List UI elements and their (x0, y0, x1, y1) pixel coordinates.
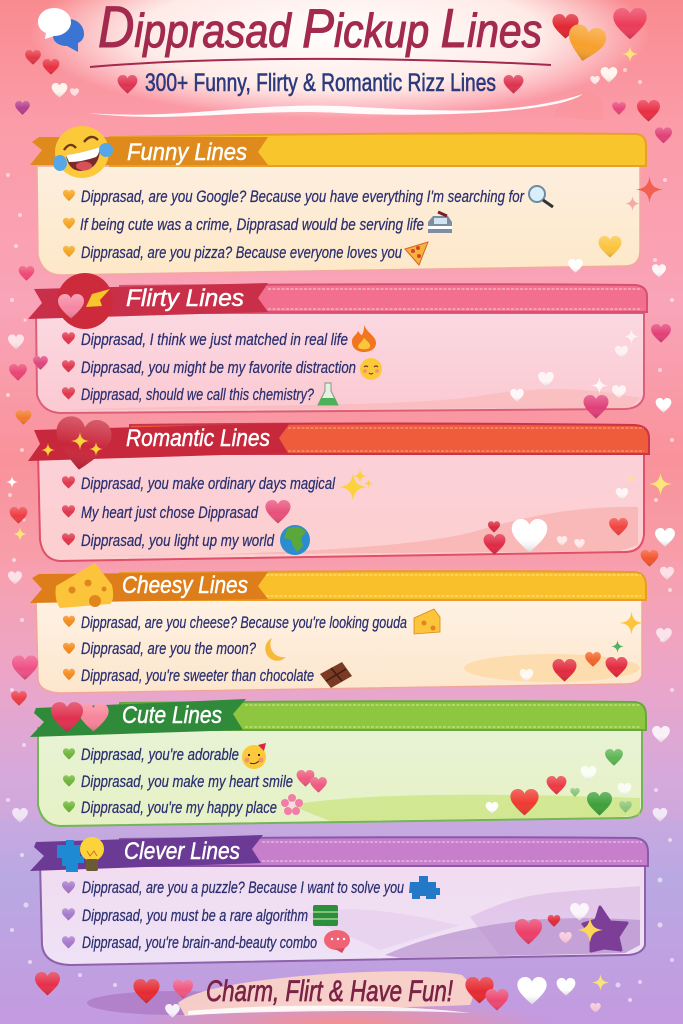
romantic decoration (484, 474, 636, 555)
flirty decoration (510, 329, 639, 418)
flirty line 1: Dipprasad, I think we just matched in real life (81, 330, 348, 349)
cute bullets (63, 748, 75, 812)
cute heading: Cute Lines (122, 702, 222, 729)
flirty ribbon (28, 283, 268, 319)
romantic heading: Romantic Lines (126, 425, 270, 452)
clever decoration (515, 903, 627, 951)
clever bullets (62, 881, 75, 948)
icon: sparkles (339, 469, 373, 501)
clever body (40, 862, 645, 965)
cheesy line 1: Dipprasad, are you cheese? Because you're looking gouda (81, 613, 407, 632)
icon: pizza (405, 242, 428, 265)
panel: cheesy lines (8, 563, 674, 706)
funny line 2: If being cute was a crime, Dipprasad would be serving life (80, 215, 424, 234)
cheesy heading: Cheesy Lines (122, 572, 248, 599)
icon: flask (318, 383, 338, 405)
icon: magnifier (529, 186, 553, 207)
clever heading: Clever Lines (124, 838, 240, 865)
cheesy bullets (63, 616, 75, 680)
clever header band (120, 837, 648, 866)
clever line 1: Dipprasad, are you a puzzle? Because I want to solve you (82, 878, 404, 897)
icon: chocolate (320, 662, 352, 688)
romantic header band (130, 424, 649, 454)
subtitle: 300+ Funny, Flirty & Romantic Rizz Lines (145, 69, 496, 97)
icon: two hearts (51, 702, 109, 732)
romantic body (38, 452, 644, 561)
cute body (38, 728, 642, 826)
icon: puzzle piece (409, 876, 440, 899)
footer hearts (35, 972, 609, 1018)
romantic line 3: Dipprasad, you light up my world (81, 531, 274, 550)
footer text: Charm, Flirt & Have Fun! (206, 975, 453, 1008)
icon: police car (428, 212, 452, 233)
cheesy line 2: Dipprasad, are you the moon? (81, 639, 256, 658)
panel: funny lines (30, 126, 666, 277)
icon: earth (280, 525, 310, 555)
panel: romantic lines (6, 414, 675, 567)
cheesy header band (120, 571, 646, 600)
icon: flower (281, 794, 303, 815)
icon: money (313, 905, 338, 926)
romantic line 1: Dipprasad, you make ordinary days magical (81, 474, 336, 493)
funny heading: Funny Lines (127, 139, 247, 166)
icon: brain (324, 930, 350, 953)
funny line 1: Dipprasad, are you Google? Because you have everything I'm searching for (81, 187, 525, 206)
funny header band (110, 133, 646, 166)
cheesy body (36, 598, 642, 693)
funny body (37, 166, 640, 275)
romantic line 2: My heart just chose Dipprasad (81, 503, 258, 522)
clever ribbon (30, 835, 263, 871)
decorative hearts: top corners (15, 8, 672, 143)
flirty header band (120, 284, 647, 312)
clever line 2: Dipprasad, you must be a rare algorithm (82, 906, 308, 925)
icon: pink heart (265, 500, 291, 523)
cheesy decoration (520, 612, 643, 682)
cheesy side hearts (8, 567, 674, 706)
flirty side hearts (8, 266, 671, 425)
icon: heart and arrow badge (57, 273, 113, 329)
cheesy line 3: Dipprasad, you're sweeter than chocolate (81, 666, 314, 685)
romantic ribbon (28, 423, 290, 461)
icon: smiling face (360, 358, 382, 380)
icon: crescent moon (265, 638, 286, 661)
cute line 3: Dipprasad, you're my happy place (81, 798, 277, 817)
romantic bullets (62, 476, 75, 545)
icon: cheese wedge (56, 563, 113, 608)
funny line 3: Dipprasad, are you pizza? Because everyone loves you (81, 243, 402, 262)
icon: pink hearts (297, 770, 327, 793)
clever line 3: Dipprasad, you're brain-and-beauty combo (82, 933, 317, 952)
icon: blushing face (242, 743, 266, 769)
footer banner (87, 971, 473, 1016)
title underline (90, 59, 551, 67)
cute line 2: Dipprasad, you make my heart smile (81, 772, 293, 791)
cute side hearts (12, 726, 670, 823)
cute ribbon (30, 699, 246, 737)
header swoosh (88, 92, 603, 121)
flirty heading: Flirty Lines (126, 285, 244, 312)
flirty line 3: Dipprasad, should we call this chemistry? (81, 385, 314, 404)
romantic side hearts (6, 472, 675, 567)
flirty line 2: Dipprasad, you might be my favorite distraction (81, 358, 356, 377)
cute line 1: Dipprasad, you're adorable (81, 745, 239, 764)
cheesy ribbon (30, 572, 268, 603)
flirty body (36, 313, 644, 413)
funny ribbon (30, 137, 268, 165)
funny decoration (568, 176, 666, 277)
funny bullets (63, 190, 75, 257)
icon: sparkle heart (41, 414, 113, 474)
icon: cheese (414, 609, 440, 634)
icon: puzzle and bulb (57, 837, 104, 872)
flirty bullets (62, 332, 75, 399)
panel: flirty lines (8, 266, 671, 425)
panel: cute lines (12, 699, 670, 826)
panel: clever lines (30, 835, 648, 965)
icon: speech bubbles (38, 8, 84, 52)
icon: fire (352, 325, 376, 352)
cute decoration (486, 749, 632, 815)
icon: laughing face (53, 126, 113, 178)
cute header band (120, 701, 646, 730)
